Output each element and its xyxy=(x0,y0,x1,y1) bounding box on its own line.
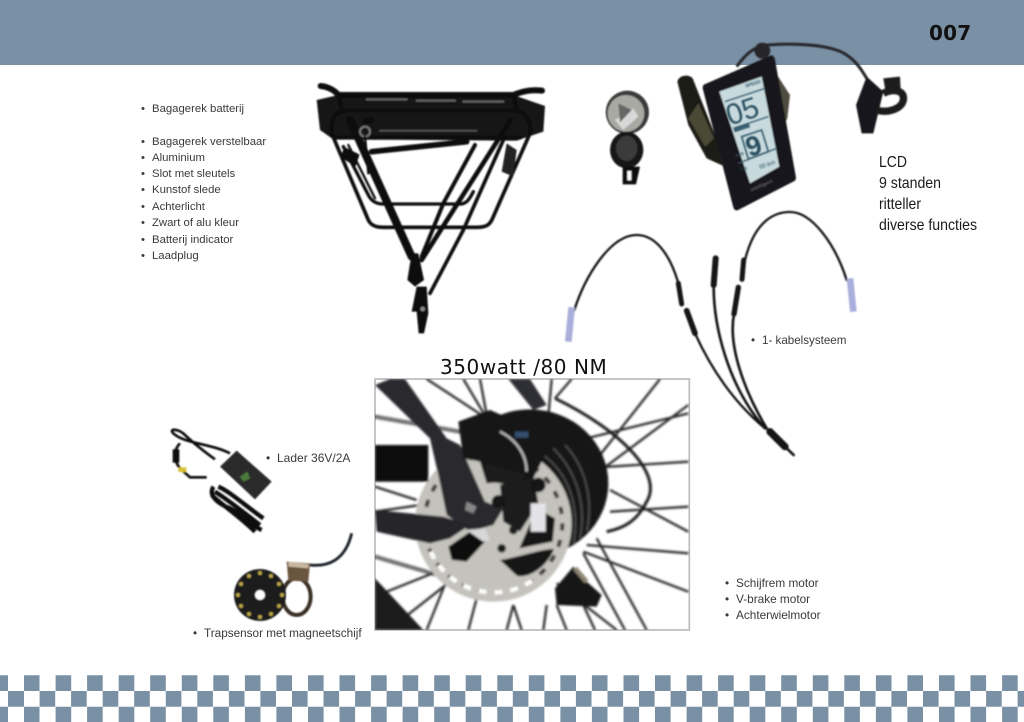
image: front light xyxy=(606,91,649,184)
image: luggage rack with battery xyxy=(317,86,545,333)
text block: rack battery features: Kunstof slede xyxy=(152,184,221,196)
text: charger label: Lader 36V/2A xyxy=(277,451,350,465)
text: pedal sensor label: • xyxy=(193,627,197,640)
image: LCD display: intelligent xyxy=(750,178,774,193)
text block: rack battery features: • xyxy=(141,250,145,262)
text block: rack battery features xyxy=(141,103,266,262)
text block: rack battery features: • xyxy=(141,136,145,148)
image: LCD display: 9 xyxy=(741,128,766,163)
image: battery charger xyxy=(172,430,272,532)
text block: motor types: • xyxy=(725,576,729,590)
text block: motor types: Schijfrem motor xyxy=(736,576,819,590)
image: pedal sensor with magnet disc xyxy=(234,533,352,621)
text block: rack battery features: • xyxy=(141,103,145,115)
text block: LCD features: 9 standen xyxy=(879,175,941,192)
text block: motor types: Achterwielmotor xyxy=(736,608,821,622)
text block: LCD features xyxy=(879,154,977,234)
header band xyxy=(0,0,1024,65)
text block: motor types: • xyxy=(725,592,729,606)
heading: motor power: 350watt /80 NM xyxy=(440,355,607,379)
page number: 007 xyxy=(929,21,971,45)
text: cable system label: 1- kabelsysteem xyxy=(762,334,846,347)
text block: LCD features: LCD xyxy=(879,154,907,171)
image: rear wheel hub motor with disc brake xyxy=(375,379,689,630)
image: LCD display xyxy=(677,43,903,209)
text block: rack battery features: Bagagerek batterij xyxy=(152,103,244,115)
text block: motor types: • xyxy=(725,608,729,622)
text: pedal sensor label: Trapsensor met magneetschijf xyxy=(204,627,362,640)
image: one-cable system wiring xyxy=(568,212,853,455)
image: LCD display: 00 km xyxy=(759,160,776,171)
text block: rack battery features: Achterlicht xyxy=(152,201,206,213)
text block: rack battery features: • xyxy=(141,184,145,196)
text block: motor types: V-brake motor xyxy=(736,592,810,606)
checkered footer xyxy=(0,675,1024,722)
text block: motor types xyxy=(725,576,821,622)
text block: rack battery features: • xyxy=(141,201,145,213)
text block: rack battery features: Slot met sleutels xyxy=(152,168,236,180)
text: charger label: • xyxy=(266,451,270,465)
text block: rack battery features: • xyxy=(141,234,145,246)
image: LCD display: 05 xyxy=(722,91,763,132)
text block: rack battery features: Bagagerek verstelbaar xyxy=(152,136,266,148)
text block: rack battery features: Batterij indicator xyxy=(152,234,234,246)
text block: LCD features: ritteller xyxy=(879,196,922,213)
text block: rack battery features: Zwart of alu kleur xyxy=(152,217,239,229)
text block: rack battery features: Aluminium xyxy=(152,152,205,164)
text block: rack battery features: Laadplug xyxy=(152,250,199,262)
text: cable system label: • xyxy=(751,334,755,347)
image: LCD display: PAS xyxy=(735,151,745,158)
image: LCD display: SPEED xyxy=(745,79,762,89)
text block: LCD features: diverse functies xyxy=(879,217,977,234)
text block: rack battery features: • xyxy=(141,152,145,164)
image: LCD display: Trip xyxy=(739,165,748,172)
text block: rack battery features: • xyxy=(141,168,145,180)
text block: rack battery features: • xyxy=(141,217,145,229)
